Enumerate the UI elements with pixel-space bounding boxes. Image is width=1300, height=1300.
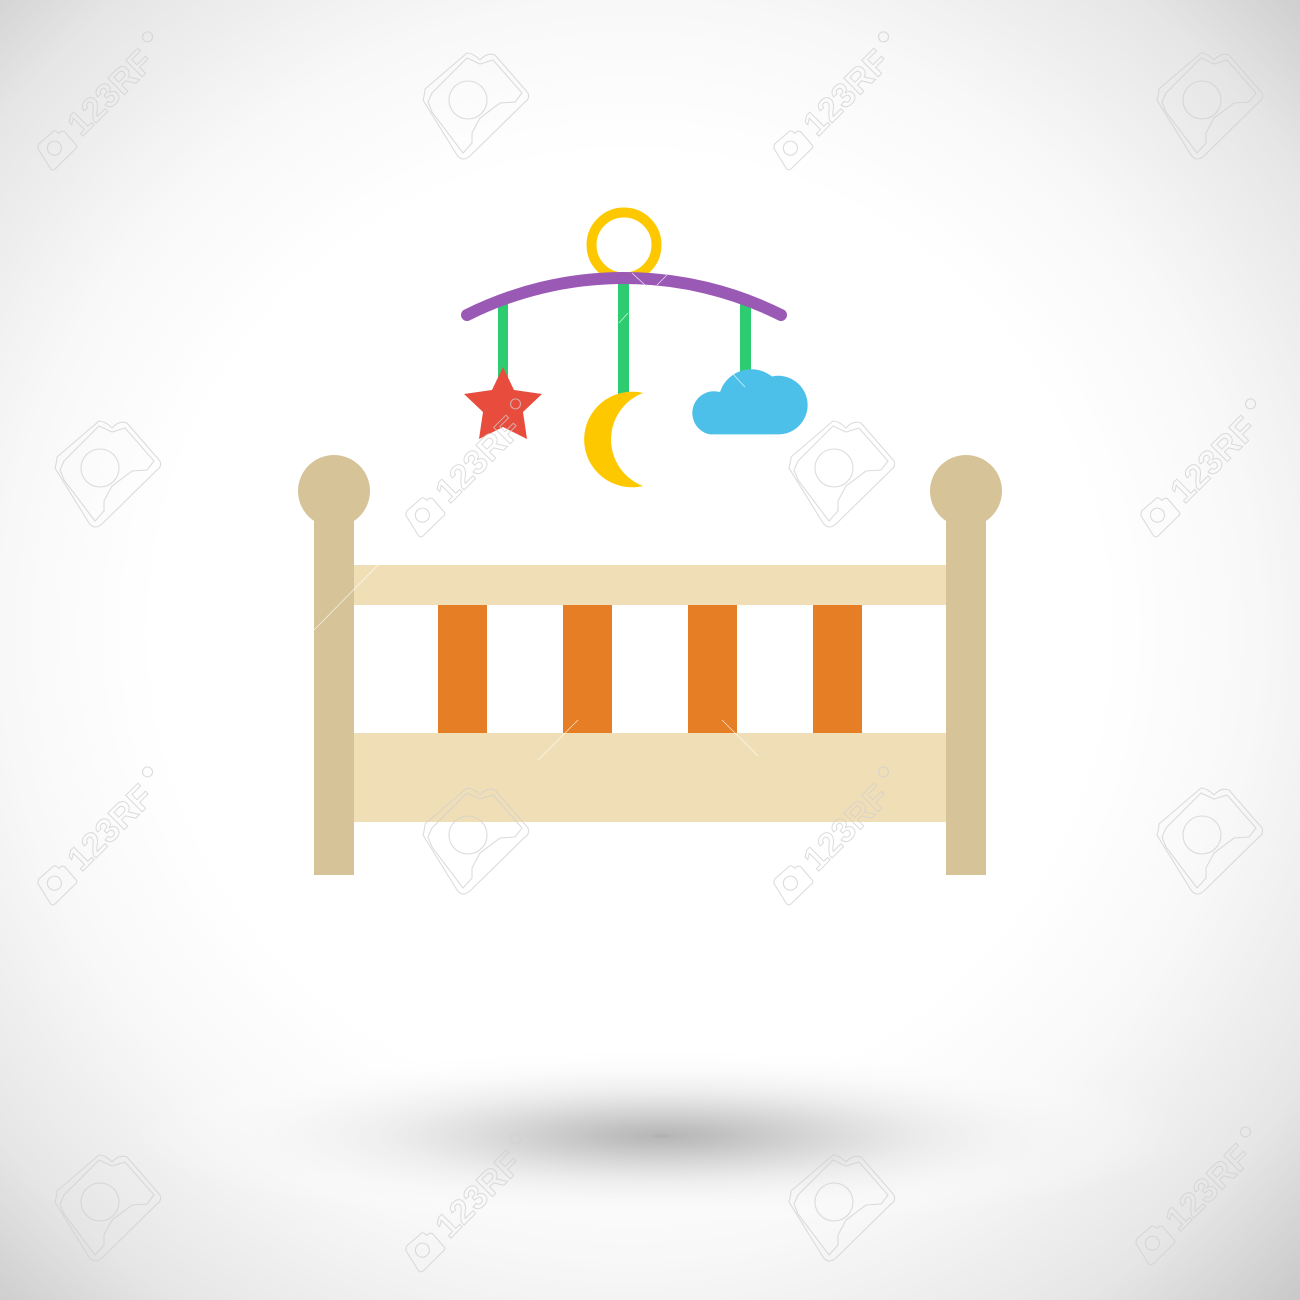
watermark: full logo row 4 far right: 123RF <box>1158 1137 1259 1238</box>
watermark: full logo row 3 right: 123RF <box>796 777 897 878</box>
watermark: full logo row 3 left <box>38 764 174 905</box>
watermark: full logo row 1 right: 123RF <box>796 42 897 143</box>
watermark: icon row 3 centre <box>423 788 529 894</box>
orange slat 1 <box>438 605 487 733</box>
top rail <box>354 565 946 605</box>
watermark: full logo row 1 left: 123RF <box>60 42 161 143</box>
orange slat 4 <box>813 605 862 733</box>
baby mobile toy <box>464 212 808 487</box>
watermark: icon row 3 far right <box>1157 788 1263 894</box>
orange slat 2 <box>563 605 612 733</box>
watermark: full logo row 1 left <box>38 29 174 170</box>
green string: star <box>498 298 508 380</box>
orange slat 3 <box>688 605 737 733</box>
watermark: full logo row 3 left: 123RF <box>60 777 161 878</box>
mobile hanging ring <box>592 212 656 278</box>
watermark: full logo row 4 centre <box>406 1131 542 1272</box>
green string: cloud <box>740 300 751 375</box>
right post <box>930 455 1002 875</box>
watermark: icon row 2 left <box>55 421 161 527</box>
watermark: icon row 2 right <box>789 421 895 527</box>
left post <box>298 455 370 875</box>
watermark: full logo row 2 far right: 123RF <box>1163 409 1264 510</box>
watermark: icon row 1 far right <box>1157 53 1263 159</box>
watermark: full logo row 4 far right <box>1136 1124 1272 1265</box>
purple mobile arm <box>467 278 781 315</box>
yellow crescent moon <box>584 392 643 487</box>
watermark: full logo row 2 far right <box>1141 396 1277 537</box>
watermark: icon row 4 left <box>55 1155 161 1261</box>
floor shadow <box>132 1046 1192 1226</box>
blue cloud <box>692 369 808 434</box>
red star <box>464 367 542 439</box>
watermark: icon row 1 centre <box>423 53 529 159</box>
green string: moon <box>618 280 629 396</box>
watermark: icon row 4 right <box>789 1155 895 1261</box>
watermark: full logo row 2 centre <box>406 396 542 537</box>
watermark: full logo row 4 centre: 123RF <box>428 1144 529 1245</box>
bottom rail <box>354 733 946 822</box>
watermark: full logo row 3 right <box>774 764 910 905</box>
crib <box>298 455 1002 875</box>
watermark: full logo row 2 centre: 123RF <box>428 409 529 510</box>
watermark: full logo row 1 right <box>774 29 910 170</box>
